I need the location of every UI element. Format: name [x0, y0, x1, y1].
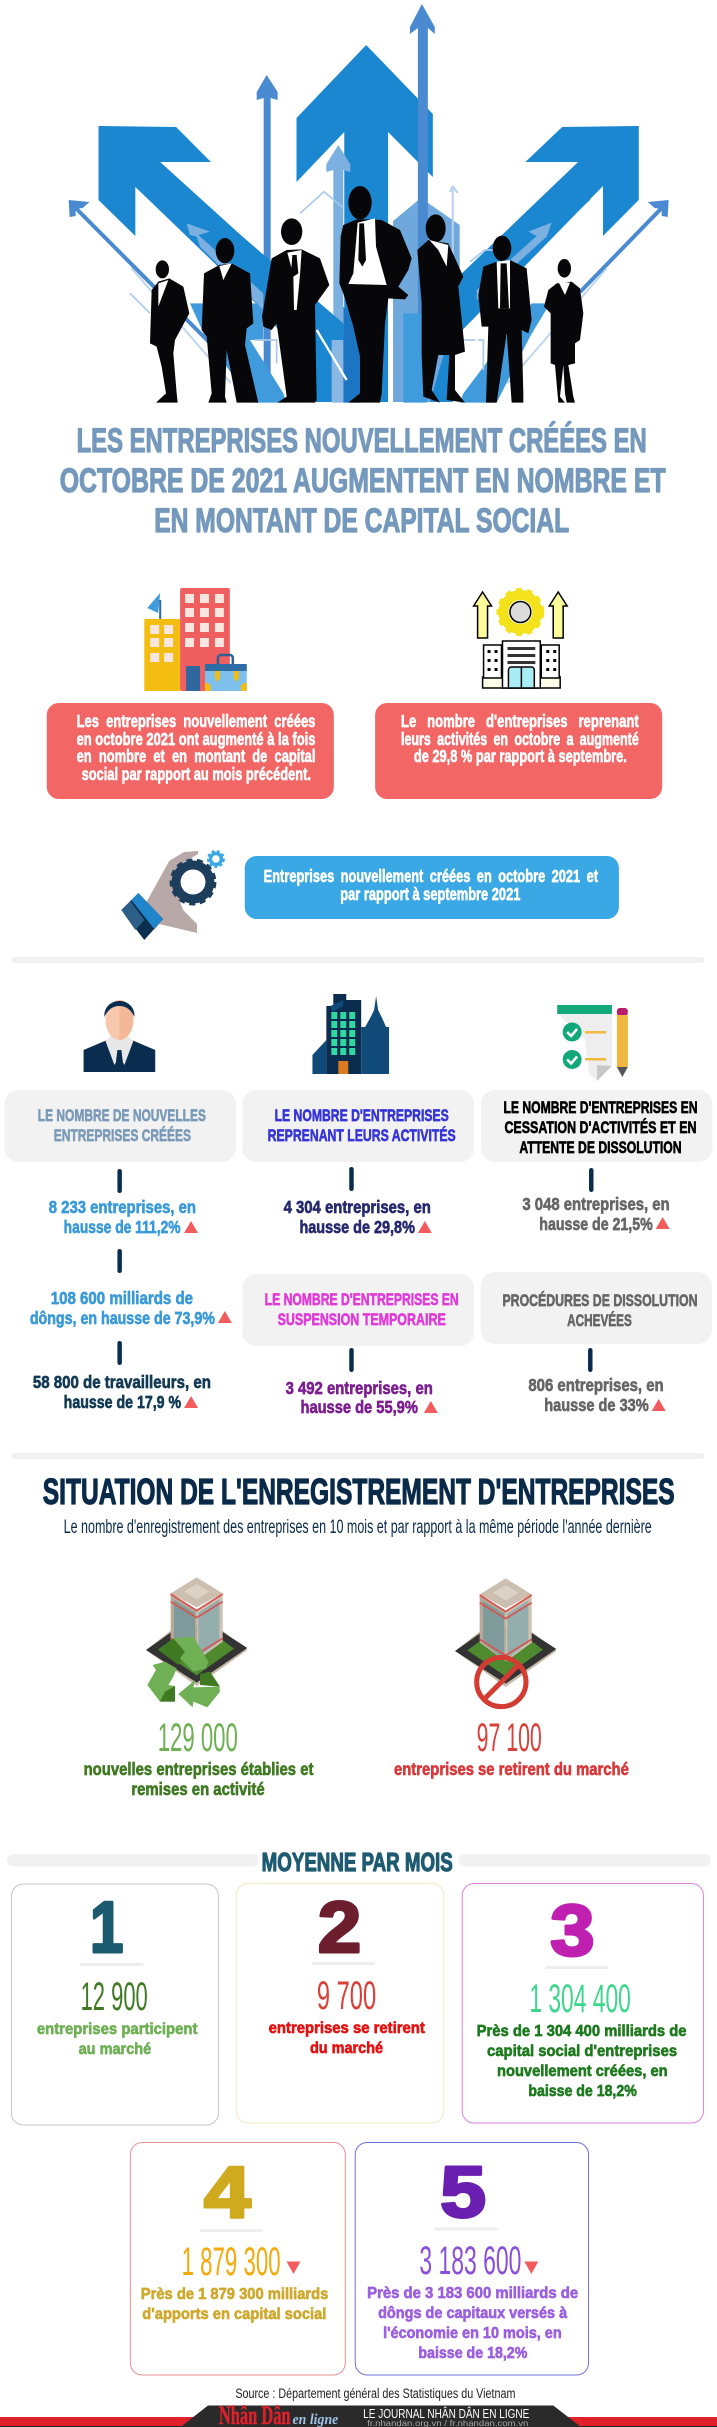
person 4: central man: [339, 186, 412, 403]
card 4: d'apports en capital social: [142, 2306, 326, 2323]
stat: cessation: 3 048 entreprises, en: [522, 1194, 670, 1214]
person 2: [202, 238, 258, 403]
lower arrows and silhouettes: [130, 180, 590, 403]
card 3: Près de 1 304 400 milliards de: [477, 2023, 687, 2040]
section heading: monthly average: MOYENNE PAR MOIS: [262, 1849, 453, 1877]
stat: dissolution: [528, 1375, 666, 1415]
icon: businessman: [84, 1000, 155, 1072]
icon: checklist and pencil: [557, 1005, 628, 1081]
banner: comparison: [245, 856, 619, 919]
stat: suspended: [286, 1378, 438, 1417]
heading: new enterprises: ENTREPRISES CRÉÉES: [54, 1126, 191, 1145]
background arrows: [69, 4, 669, 402]
stat: cessation: [522, 1194, 670, 1234]
stat: suspended: hausse de 55,9%: [300, 1397, 418, 1417]
person 3: [262, 218, 329, 403]
callout: new enterprises: [47, 703, 334, 799]
heading: resumed activities: LE NOMBRE D'ENTREPRISES: [275, 1106, 449, 1125]
icon: buildings and briefcase: [144, 588, 247, 691]
heading: dissolution completed: [481, 1272, 712, 1344]
stat: dissolution: hausse de 33%: [544, 1395, 649, 1415]
title: [60, 422, 666, 540]
footer banner: LE JOURNAL NHÂN DÂN EN LIGNE: [363, 2406, 530, 2421]
heading: resumed activities: [242, 1090, 474, 1162]
title: EN MONTANT DE CAPITAL SOCIAL: [154, 502, 569, 540]
icon: building with prohibition sign: [455, 1578, 556, 1707]
callout: new enterprises: social par rapport au mois précédent.: [82, 764, 311, 784]
banner: comparison: par rapport à septembre 2021: [340, 884, 520, 904]
stat: enterprises: hausse de 111,2%: [64, 1217, 181, 1237]
heading: new enterprises: LE NOMBRE DE NOUVELLES: [38, 1106, 206, 1125]
card 2: 9 700: [317, 1974, 376, 2018]
section heading: registration: [43, 1471, 675, 1538]
card 4: [130, 2142, 345, 2375]
stat: resumed: hausse de 29,8%: [299, 1217, 415, 1237]
card 3: baisse de 18,2%: [528, 2083, 637, 2100]
heading: resumed activities: REPRENANT LEURS ACTIVITÉS: [268, 1126, 456, 1145]
number 3: 3: [550, 1891, 595, 1971]
stat: 129 000: nouvelles entreprises établies et: [84, 1759, 313, 1779]
card 4: 1 879 300: [182, 2240, 281, 2284]
stat: resumed: [284, 1197, 432, 1237]
person 1: [150, 260, 189, 403]
card 3: [462, 1884, 703, 2123]
stat: capital: dôngs, en hausse de 73,9%: [30, 1308, 215, 1328]
card 3: capital social d'entreprises: [487, 2043, 677, 2060]
card 1: 12 900: [81, 1975, 148, 2019]
card 5: [355, 2142, 589, 2375]
card 1: [11, 1884, 218, 2125]
callout: new enterprises: Les entreprises nouvellement créées: [77, 711, 315, 731]
heading: cessation: [481, 1090, 712, 1162]
card 2: [236, 1884, 444, 2123]
stat: enterprises: 8 233 entreprises, en: [49, 1197, 196, 1217]
stat: workers: 58 800 de travailleurs, en: [33, 1372, 211, 1392]
stat: enterprises: [49, 1197, 198, 1237]
callout: resumed activities: [375, 703, 662, 799]
person 5: woman: [417, 214, 465, 403]
number 2: 2: [318, 1888, 361, 1968]
panel: cessation and dissolution column: [481, 1090, 712, 1415]
card 5: 3 183 600: [419, 2239, 521, 2283]
callout: resumed activities: Le nombre d'entreprises reprenant: [401, 711, 639, 731]
callout: new enterprises: en nombre et en montant de capital: [77, 746, 315, 766]
card 3: nouvellement créées, en: [497, 2063, 668, 2080]
stat: workers: [33, 1372, 211, 1412]
card 3: 1 304 400: [529, 1977, 631, 2021]
heading: temporary suspension: [242, 1274, 474, 1346]
stat: dissolution: 806 entreprises, en: [528, 1375, 664, 1395]
card 4: Près de 1 879 300 milliards: [141, 2286, 328, 2303]
number 1: 1: [90, 1888, 123, 1968]
panel: new enterprises column: [4, 1090, 236, 1412]
footer banner: [0, 2401, 717, 2427]
stat: 129 000: remises en activité: [131, 1779, 265, 1799]
number 5: 5: [440, 2153, 486, 2233]
stat: 97 100: 97 100: [477, 1716, 542, 1760]
number 4: 4: [204, 2153, 251, 2233]
card 2: entreprises se retirent: [269, 2020, 425, 2037]
icon: gear, arrows and building: [474, 590, 567, 688]
stat: 129 000: [84, 1716, 313, 1799]
panel: resumed and suspended column: [242, 1090, 474, 1417]
stat: capital: [30, 1288, 232, 1328]
stat: 129 000: 129 000: [158, 1716, 238, 1760]
icon: city buildings: [312, 994, 389, 1074]
banner: comparison: Entreprises nouvellement créées en octobre 2021 et: [264, 866, 598, 886]
hero illustration: business people and rising arrows: [69, 4, 669, 403]
stat: suspended: 3 492 entreprises, en: [286, 1378, 433, 1398]
card 5: l'économie en 10 mois, en: [383, 2325, 562, 2342]
heading: new enterprises: [4, 1090, 236, 1162]
icon: hand holding gear: [121, 851, 224, 940]
card 5: Près de 3 183 600 milliards de: [367, 2285, 578, 2302]
heading: temporary suspension: LE NOMBRE D'ENTREPRISES EN: [265, 1290, 459, 1309]
stat: workers: hausse de 17,9 %: [64, 1392, 181, 1412]
stat: 97 100: entreprises se retirent du marché: [394, 1759, 629, 1779]
heading: temporary suspension: SUSPENSION TEMPORAIRE: [278, 1310, 446, 1329]
callout: new enterprises: en octobre 2021 ont augmenté à la fois: [77, 729, 315, 749]
stat: resumed: 4 304 entreprises, en: [284, 1197, 431, 1217]
icon: building with recycling: [146, 1577, 247, 1707]
card 5: dôngs de capitaux versés à: [378, 2305, 567, 2322]
card 2: du marché: [310, 2040, 383, 2057]
source: Source : Département général des Statistiques du Vietnam: [235, 2385, 515, 2401]
section heading: monthly average: [7, 1849, 710, 1877]
card 1: au marché: [79, 2041, 151, 2058]
card 1: entreprises participent: [37, 2021, 198, 2038]
stat: capital: 108 600 milliards de: [51, 1288, 193, 1308]
stat: 97 100: [394, 1716, 629, 1779]
stat: cessation: hausse de 21,5%: [539, 1214, 653, 1234]
heading: dissolution completed: ACHEVÉES: [567, 1311, 632, 1330]
person 7: woman: [544, 259, 583, 403]
callout: resumed activities: de 29,8 % par rapport à septembre.: [414, 746, 627, 766]
person 6: [478, 236, 532, 403]
card 5: baisse de 18,2%: [418, 2345, 527, 2362]
